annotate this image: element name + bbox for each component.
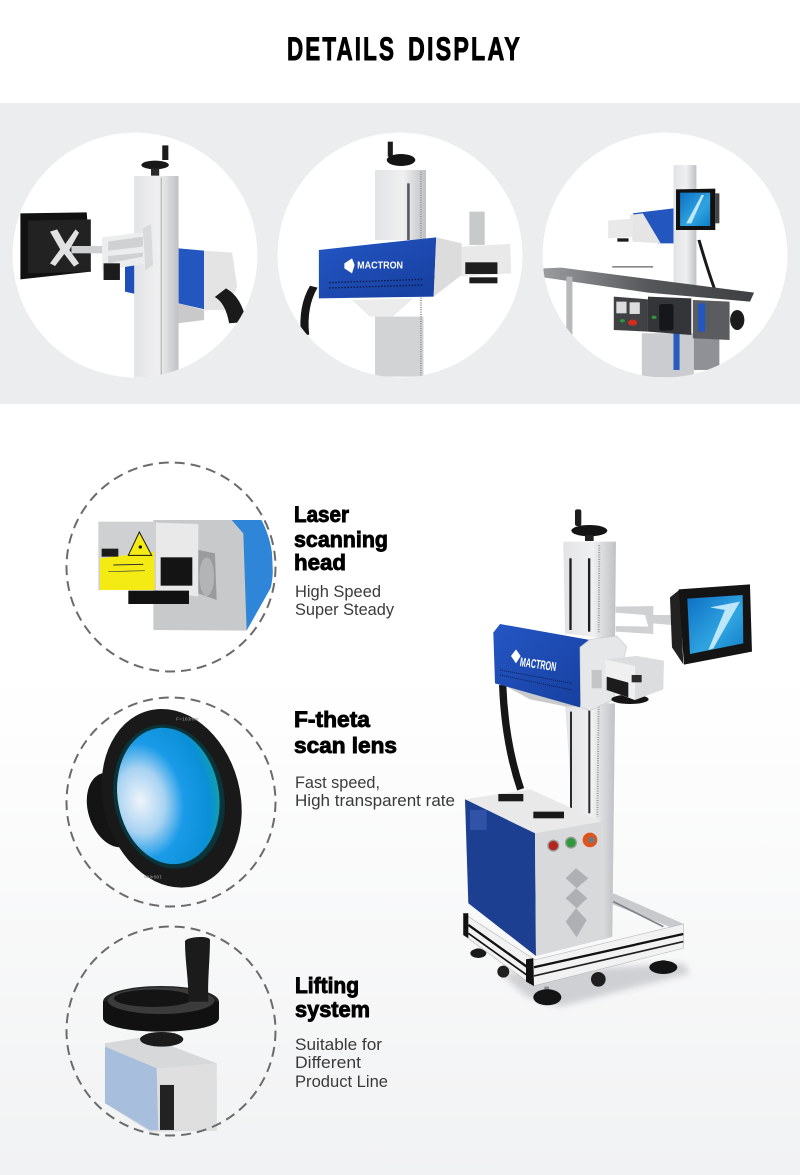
- text block: f-theta scan lens: F-theta: [294, 707, 370, 732]
- text block: lifting system: Different: [295, 1053, 361, 1072]
- detail circle: laser scanning head: [66, 462, 276, 672]
- monitor: [670, 584, 752, 665]
- product photo: laser marking machine: [463, 509, 752, 1007]
- text block: laser scanning head: Laser: [294, 502, 349, 527]
- laser head housing: MACTRON: [519, 655, 557, 674]
- detail circle: f-theta scan lens: 1064nm: [144, 873, 162, 879]
- galvo scan box: [605, 656, 664, 704]
- text block: laser scanning head: Super Steady: [295, 600, 394, 619]
- control cabinet: [465, 789, 603, 956]
- circle photo: laser head view: [278, 132, 522, 378]
- title: [287, 31, 522, 67]
- text block: f-theta scan lens: Fast speed,: [295, 773, 380, 792]
- text block: lifting system: [295, 973, 388, 1091]
- title: DISPLAY: [408, 31, 522, 67]
- detail circle: f-theta scan lens: F=163mm: [176, 717, 199, 723]
- circle photo: laser head view: MACTRON: [357, 259, 403, 271]
- text block: lifting system: Suitable for: [295, 1035, 382, 1054]
- text block: laser scanning head: High Speed: [295, 582, 381, 601]
- text block: laser scanning head: [294, 502, 394, 619]
- detail circle: lifting system handwheel: [66, 926, 276, 1136]
- monitor arm: [616, 606, 672, 634]
- laser head housing: [493, 624, 627, 711]
- text block: f-theta scan lens: scan lens: [294, 733, 397, 758]
- text block: lifting system: Product Line: [295, 1072, 388, 1091]
- title: DETAILS: [287, 31, 396, 67]
- detail circle: f-theta scan lens: [66, 693, 276, 906]
- column: [563, 542, 616, 940]
- panel: product views band: [0, 103, 800, 404]
- text block: f-theta scan lens: High transparent rate: [295, 791, 455, 810]
- handwheel: [571, 509, 607, 541]
- fiber cable: [503, 685, 521, 789]
- circle photo: conveyor line view: [542, 132, 788, 378]
- floor shadow: [500, 963, 690, 1007]
- circle photo: monitor arm view: [12, 132, 258, 378]
- wheeled base: [463, 893, 684, 1005]
- page background: [0, 404, 800, 1175]
- text block: lifting system: system: [295, 997, 370, 1022]
- text block: laser scanning head: head: [294, 550, 346, 575]
- text block: f-theta scan lens: [294, 707, 455, 810]
- text block: lifting system: Lifting: [295, 973, 359, 998]
- text block: laser scanning head: scanning: [294, 527, 388, 552]
